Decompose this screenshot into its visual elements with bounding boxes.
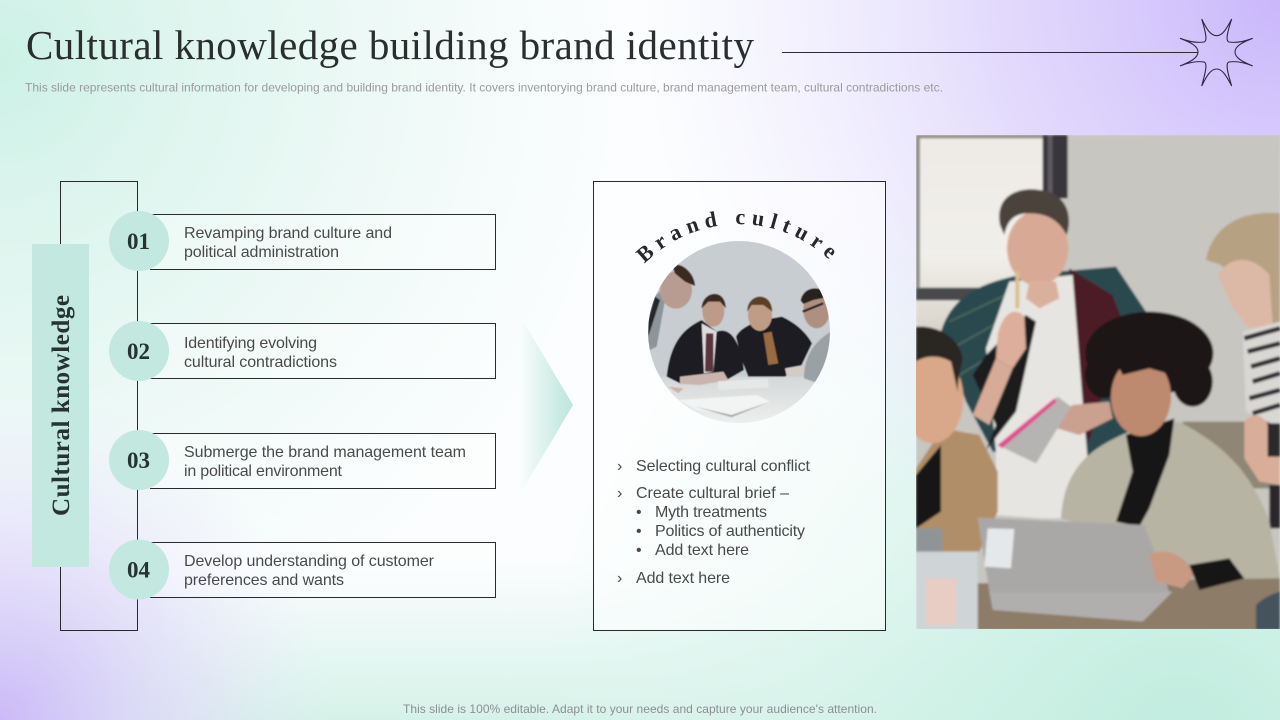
bullet list: • xyxy=(636,504,642,521)
icon: eight-point star xyxy=(1180,19,1253,86)
bullet list: Politics of authenticity xyxy=(655,523,805,540)
photo: team around laptop xyxy=(902,135,1280,630)
seated woman xyxy=(1061,422,1280,585)
text 02: cultural contradictions xyxy=(184,354,337,371)
number 03: 03 xyxy=(127,448,150,473)
jar xyxy=(916,552,978,630)
bullet list: Add text here xyxy=(636,570,730,587)
text 02: Identifying evolving xyxy=(184,335,317,352)
bullet list: Selecting cultural conflict xyxy=(636,458,811,475)
text 04: preferences and wants xyxy=(184,572,344,589)
arrow xyxy=(520,316,573,494)
blonde woman xyxy=(1206,213,1280,328)
bracket frame xyxy=(60,182,138,630)
number 01: 01 xyxy=(127,229,150,254)
curved heading: Brand culture xyxy=(635,211,834,264)
table xyxy=(978,578,1280,630)
band label: Cultural knowledge xyxy=(48,295,75,516)
bullet list: Add text here xyxy=(655,542,749,559)
subtitle: This slide represents cultural information for developing and building brand identity. It covers inventorying brand culture, brand management team, cultural contradictions etc. xyxy=(25,80,943,94)
bullet list: › xyxy=(617,458,622,475)
row 01 xyxy=(109,211,496,271)
laptop xyxy=(978,518,1169,592)
row 04 xyxy=(109,540,496,600)
row 03 xyxy=(109,430,496,490)
row 02 xyxy=(109,321,496,381)
number 02: 02 xyxy=(127,339,150,364)
bullet list: › xyxy=(617,485,622,502)
text 01: Revamping brand culture and xyxy=(184,225,392,242)
number 04: 04 xyxy=(127,558,150,582)
bullet list: • xyxy=(636,542,642,559)
bullet list: Myth treatments xyxy=(655,504,767,521)
footer note: This slide is 100% editable. Adapt it to your needs and capture your audience's attention. xyxy=(403,702,877,716)
text 04: Develop understanding of customer xyxy=(184,553,435,570)
title: Cultural knowledge building brand identity xyxy=(26,22,754,68)
panel: cultural knowledge band xyxy=(32,244,89,567)
circular photo: business team xyxy=(643,237,833,427)
text 01: political administration xyxy=(184,244,339,261)
text 03: Submerge the brand management team xyxy=(184,444,466,461)
title rule xyxy=(782,52,1198,54)
bullet list: › xyxy=(617,570,622,587)
bullet list: Create cultural brief – xyxy=(636,485,789,502)
bullet list xyxy=(617,458,811,587)
panel: brand culture xyxy=(593,181,886,631)
man left xyxy=(916,428,998,552)
text 03: in political environment xyxy=(184,463,343,480)
bullet list: • xyxy=(636,523,642,540)
